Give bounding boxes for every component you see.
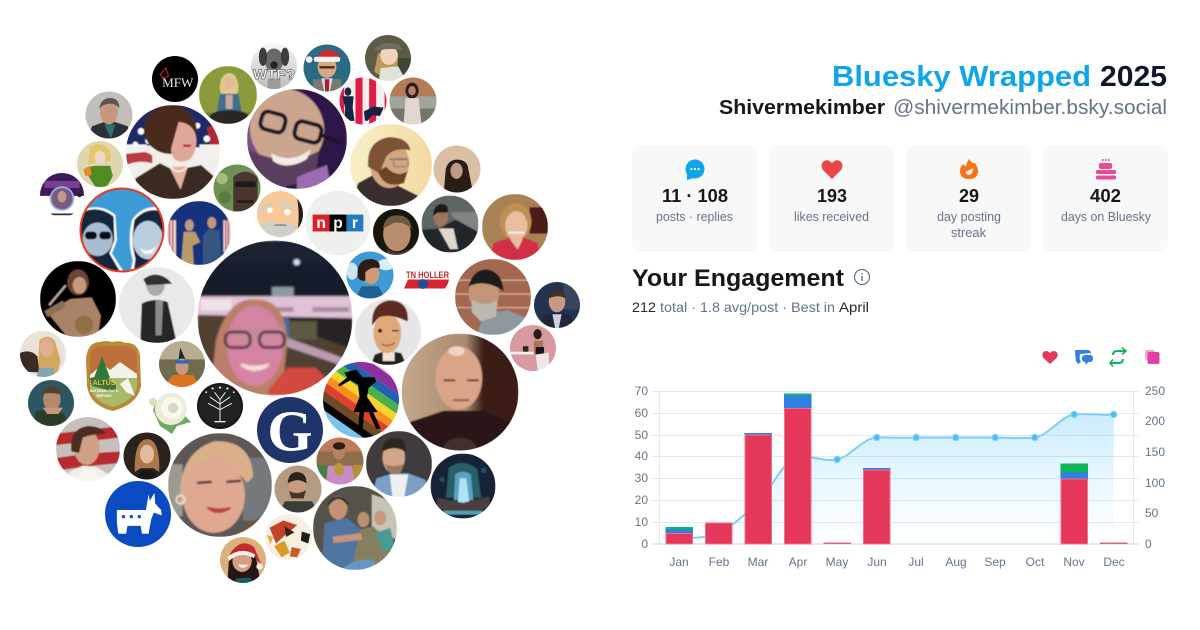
bar: Jan xyxy=(666,527,693,544)
avatar: Altus National Park patch: ALTUS xyxy=(93,380,116,387)
stat card: days on Bluesky xyxy=(1043,145,1168,252)
avatar: man in Santa hat xyxy=(304,44,350,92)
stat card: posts and replies: 11 · 108 xyxy=(662,186,728,206)
avatar: smiling woman in red xyxy=(482,194,548,260)
avatar: NPR logo: p xyxy=(333,215,343,232)
avatar: MFW logo xyxy=(152,56,198,102)
avatar: man in suit with flag xyxy=(534,282,580,328)
avatar: The Guardian G logo xyxy=(257,397,323,463)
bar: Apr xyxy=(784,394,812,544)
summary line: total · 1.8 avg/post · Best in xyxy=(660,299,835,315)
logo: TN Holler: TN HOLLER xyxy=(406,270,449,281)
bar: May xyxy=(824,542,851,544)
month labels: Apr xyxy=(789,555,807,569)
month labels: Aug xyxy=(945,555,967,569)
stat card: day posting streak: streak xyxy=(951,226,987,240)
month labels: Dec xyxy=(1103,555,1125,569)
avatar: main selfie of smiling woman at night xyxy=(198,240,352,396)
avatar: profile screenshot xyxy=(40,173,84,217)
bar: Dec xyxy=(1100,542,1128,544)
avatar: Altus National Park patch: NATIONAL PARK xyxy=(90,389,119,393)
icon: white rose xyxy=(149,393,191,434)
avatar: WTF dog meme: WTF? xyxy=(253,67,295,82)
avatar: NPR logo xyxy=(306,190,370,256)
bar: Jun xyxy=(863,468,890,544)
stat card: days on Bluesky: days on Bluesky xyxy=(1061,210,1152,224)
left axis labels: 20 xyxy=(635,493,648,507)
avatar: woman with American flag xyxy=(126,105,220,199)
stat card: day posting streak: 29 xyxy=(959,186,979,206)
left axis labels: 40 xyxy=(635,449,648,463)
month labels: Oct xyxy=(1026,555,1045,569)
avatar bubble cluster xyxy=(20,35,580,583)
month labels: Mar xyxy=(748,555,768,569)
stat card: day posting streak: day posting xyxy=(937,210,1001,224)
stat card: day posting streak xyxy=(906,145,1031,252)
left axis labels: 0 xyxy=(641,537,648,551)
avatar: man with beard and glasses xyxy=(350,124,432,206)
avatar: man with coconut xyxy=(316,438,364,484)
left axis labels: 10 xyxy=(635,515,648,529)
avatar: bald man in dark shirt with microphone xyxy=(402,334,518,463)
month labels: Jan xyxy=(669,555,689,569)
avatar: woman with dark hair xyxy=(434,146,480,192)
avatar: man in sunglasses xyxy=(214,164,260,212)
avatar: older man close-up xyxy=(373,209,419,255)
avatar: cartoon blonde woman xyxy=(77,141,123,187)
bar: Mar xyxy=(744,433,772,544)
month labels: Jun xyxy=(867,555,887,569)
stat card: posts and replies: posts · replies xyxy=(656,210,733,224)
stat card: days on Bluesky: 402 xyxy=(1090,186,1121,206)
avatar: The Guardian G logo: G xyxy=(267,398,313,463)
avatar: blonde woman in field xyxy=(199,66,257,124)
left axis labels: 70 xyxy=(635,384,648,398)
avatar: man with beanie and gray beard xyxy=(455,259,531,335)
month labels: Sep xyxy=(984,555,1006,569)
month labels xyxy=(669,555,1125,569)
avatar: dark man with hands at mouth xyxy=(28,380,74,426)
avatar: smiling man with glasses xyxy=(247,89,347,189)
avatar: dark-haired man leaning xyxy=(422,196,478,252)
avatar: two people shaking hands xyxy=(167,201,231,265)
avatar: WTF dog meme xyxy=(251,43,297,89)
avatar: white tree of Gondor xyxy=(197,383,243,429)
right axis labels: 100 xyxy=(1145,476,1165,490)
logo: TN Holler xyxy=(404,270,449,289)
title: Bluesky Wrapped xyxy=(832,61,1091,93)
avatar: woman dark background smiling xyxy=(124,432,170,480)
avatar: Altus National Park patch xyxy=(86,341,141,411)
cumulative area xyxy=(679,414,1114,544)
avatar: blonde woman selfie in car xyxy=(168,433,272,537)
avatar: woman with sword on black xyxy=(40,261,116,337)
avatar: young man with flag xyxy=(56,417,120,481)
avatar: cartoon bald grumpy face xyxy=(257,191,303,237)
avatar: flag with runner and dog xyxy=(340,78,386,124)
month labels: Feb xyxy=(709,555,730,569)
avatar: army group in helicopter xyxy=(313,486,397,570)
avatar: man in leather jacket xyxy=(119,267,195,343)
cumulative line xyxy=(679,414,1114,539)
legend icons xyxy=(1042,348,1160,366)
avatar: man with hat selfie xyxy=(159,341,205,387)
icon: legend reposts xyxy=(1110,348,1126,366)
display name: Shivermekimber xyxy=(719,97,885,119)
line markers xyxy=(834,411,1117,463)
stat card: posts and replies xyxy=(632,145,757,252)
right axis labels: 50 xyxy=(1145,506,1159,520)
icon: info xyxy=(854,270,870,284)
handle: @shivermekimber.bsky.social xyxy=(893,97,1167,119)
month labels: Nov xyxy=(1063,555,1085,569)
icon: heart xyxy=(822,160,842,179)
avatar: man gray background xyxy=(86,92,132,138)
summary line: 212 xyxy=(632,299,656,315)
stat card: likes received xyxy=(769,145,894,252)
title: 2025 xyxy=(1100,61,1167,93)
avatar: blonde woman with small dog xyxy=(20,331,66,377)
avatar: rainbow flag silhouette xyxy=(323,362,399,438)
avatar: colorful donut art xyxy=(265,514,311,560)
stacked bars xyxy=(666,394,1128,544)
icon: legend heart xyxy=(1042,351,1058,364)
right axis labels: 200 xyxy=(1145,414,1165,428)
stat card: likes received: likes received xyxy=(794,210,869,224)
avatar: Democratic donkey xyxy=(105,481,171,547)
right axis labels: 150 xyxy=(1145,445,1165,459)
avatar: cartoon young man 3D xyxy=(355,299,421,365)
avatar: woman in cap xyxy=(365,35,411,81)
avatar: man with dark beard xyxy=(274,466,322,512)
month labels: Jul xyxy=(908,555,924,569)
icon: birthday cake xyxy=(1096,159,1116,180)
right axis labels: 0 xyxy=(1145,537,1152,551)
left axis labels xyxy=(635,384,648,551)
icon: chat bubble xyxy=(686,160,704,180)
avatar: two men blue poster, red ring xyxy=(80,188,164,272)
avatar: curly-haired cartoon man xyxy=(346,252,394,298)
icon: legend quotes xyxy=(1145,350,1160,364)
chart: monthly engagement xyxy=(635,384,1165,569)
left axis labels: 30 xyxy=(635,471,648,485)
heading: Your Engagement: Your Engagement xyxy=(632,265,844,292)
avatar: NPR logo: r xyxy=(352,215,358,232)
avatar: laughing woman in Santa hat xyxy=(220,537,266,583)
avatar: Altus National Park patch: SERVICE xyxy=(96,394,112,398)
bar: Nov xyxy=(1060,464,1088,544)
bar: Feb xyxy=(706,523,732,544)
grid lines xyxy=(652,391,1139,544)
avatar: NPR logo: n xyxy=(316,215,326,232)
icon: legend replies xyxy=(1075,350,1093,365)
avatar: magical glowing book xyxy=(430,454,496,518)
month labels: May xyxy=(826,555,848,569)
avatar: woman at table on pink xyxy=(510,325,556,371)
icon: flame xyxy=(960,159,978,179)
right axis labels xyxy=(1145,384,1165,551)
avatar: man in blue blazer xyxy=(366,431,432,497)
right axis labels: 250 xyxy=(1145,384,1165,398)
left axis labels: 60 xyxy=(635,406,648,420)
left axis labels: 50 xyxy=(635,428,648,442)
avatar: MFW logo: MFW xyxy=(162,76,194,90)
stat card: likes received: 193 xyxy=(817,186,847,206)
summary line: April xyxy=(839,299,869,315)
avatar: woman in white top xyxy=(390,78,436,124)
